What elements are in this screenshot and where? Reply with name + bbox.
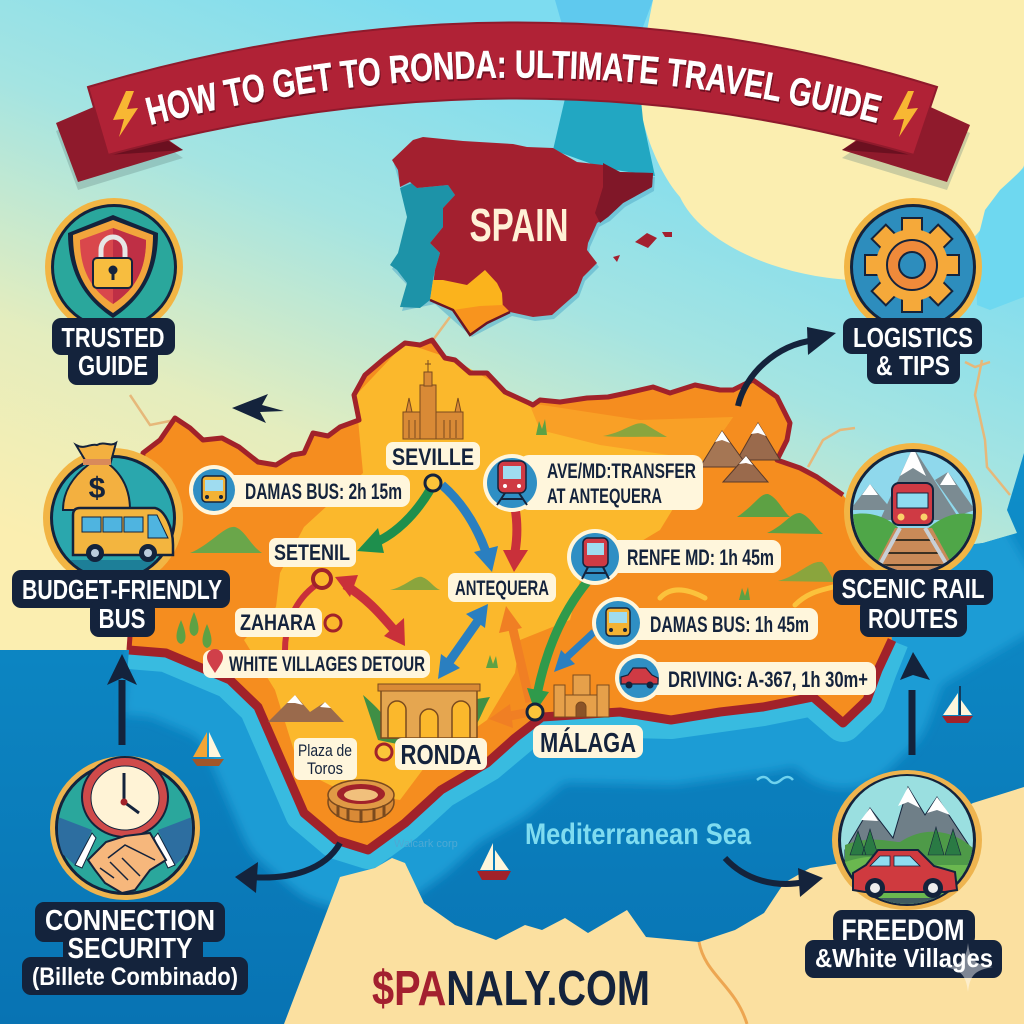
arrow: to Trusted Guide — [232, 394, 284, 423]
label: Mediterranean Sea: Mediterranean Sea — [525, 818, 751, 851]
callout: Damas bus 2h 15m: DAMAS BUS: 2h 15m — [245, 479, 402, 504]
callout: Renfe MD 1h 45m: RENFE MD: 1h 45m — [627, 545, 774, 570]
label: Scenic Rail Routes — [833, 570, 993, 637]
landmark: Ronda bridge — [363, 684, 490, 745]
icon: bus and money bag — [43, 440, 183, 570]
title banner — [56, 22, 970, 190]
icon: sparkle — [945, 943, 993, 992]
callout: Damas bus 1h 45m — [592, 597, 818, 649]
callout: Damas bus 1h 45m: DAMAS BUS: 1h 45m — [650, 612, 809, 637]
map: Andalusia region — [129, 340, 892, 850]
arrow: Seville to Setenil (green) — [357, 490, 430, 553]
map: Spain locator — [390, 137, 672, 337]
panel: Freedom and White Villages — [805, 770, 1002, 978]
arrow: Malaga to Antequera (orange) — [499, 606, 530, 702]
label: Logistics and Tips: & TIPS — [876, 350, 950, 381]
map decorations: mountains and hills — [176, 419, 835, 722]
landmark: Malaga castle — [554, 675, 609, 717]
label: Spain: SPAIN — [470, 199, 568, 251]
panel: Trusted Guide — [45, 198, 183, 385]
label: Connection Security: SECURITY — [68, 933, 192, 965]
icon: red car in mountains — [832, 770, 982, 910]
arrow: bus to Malaga (blue) — [554, 632, 594, 672]
icon: gear — [844, 198, 982, 336]
callout: AVE/MD transfer: AT ANTEQUERA — [547, 485, 662, 508]
label: Trusted Guide — [52, 318, 175, 385]
arrow: Setenil to Ronda (red double) — [335, 575, 405, 646]
location markers — [313, 475, 543, 760]
callout: Driving A-367: DRIVING: A-367, 1h 30m+ — [668, 667, 868, 692]
label: Freedom and White Villages — [805, 910, 1002, 978]
label: Connection Security — [22, 902, 248, 995]
title text: HOW TO GET TO RONDA: ULTIMATE TRAVEL GUIDE — [145, 50, 884, 127]
label: Scenic Rail Routes: SCENIC RAIL — [842, 573, 984, 604]
panel: Connection Security — [22, 756, 248, 995]
brand: Spanaly.com: $PANALY.COM — [372, 962, 650, 1016]
label: Plaza de Toros: Toros — [307, 759, 343, 778]
panel: Scenic Rail Routes — [833, 443, 993, 637]
arrow: Renfe to Malaga (green) — [527, 582, 587, 712]
label: Zahara: ZAHARA — [240, 610, 316, 635]
arrow: Seville to Antequera (blue) — [442, 485, 498, 572]
arrow: to Connection Security — [235, 843, 340, 893]
label: Scenic Rail Routes: ROUTES — [868, 603, 958, 634]
panel: Logistics and Tips — [843, 198, 982, 384]
icon: train in mountains — [844, 443, 982, 581]
label: Ronda: RONDA — [400, 739, 482, 770]
label: White Villages Detour — [203, 649, 430, 678]
icon: sailboats and waves — [192, 686, 973, 880]
arrow: Setenil detour arc (red) — [285, 585, 316, 650]
icon: clock and handshake — [50, 756, 200, 900]
label: Trusted Guide: TRUSTED — [62, 322, 164, 353]
sea — [0, 453, 1024, 1024]
icon: lightning left — [113, 91, 138, 137]
label: Logistics and Tips — [843, 318, 982, 384]
arrow: train to Antequera (red) — [503, 508, 528, 572]
label: Budget-Friendly Bus: BUDGET-FRIENDLY — [22, 574, 222, 605]
bottom land: north Africa — [284, 787, 1024, 1024]
icon: shield with lock — [45, 198, 183, 336]
label: Plaza de Toros: Plaza de — [298, 741, 352, 760]
landmark: Seville cathedral — [403, 360, 463, 439]
label: Budget-Friendly Bus: BUS — [98, 603, 146, 634]
icon: bus and money bag: $ — [89, 472, 106, 505]
icon: lightning right — [893, 91, 918, 137]
watermark: Walcark corp — [394, 838, 458, 850]
label: Setenil: SETENIL — [274, 540, 350, 565]
landmark: Plaza de Toros — [328, 780, 394, 823]
callout: AVE/MD transfer — [483, 454, 703, 512]
label: Trusted Guide: GUIDE — [78, 350, 148, 381]
panel: Budget-Friendly Bus — [12, 443, 230, 637]
callout: Damas bus 2h 15m — [189, 465, 410, 515]
label: Budget-Friendly Bus — [12, 570, 230, 637]
callout: Renfe MD 1h 45m — [567, 529, 781, 585]
label: Freedom and White Villages: FREEDOM — [842, 914, 964, 947]
icon: map pin — [207, 649, 223, 673]
arrow: to Logistics — [738, 327, 836, 406]
label: Seville: SEVILLE — [392, 444, 474, 471]
label: Connection Security: (Billete Combinado) — [32, 963, 238, 991]
label: Malaga: MÁLAGA — [540, 727, 636, 758]
arrow: Antequera to Ronda (blue double) — [438, 604, 488, 679]
label: Freedom and White Villages: &White Villages — [815, 943, 993, 973]
callout: AVE/MD transfer: AVE/MD:TRANSFER — [547, 460, 696, 483]
routes: arrows — [285, 485, 594, 728]
arrow: up to Scenic Rail — [900, 652, 930, 755]
label: Connection Security: CONNECTION — [45, 905, 215, 937]
arrows: navy connectors — [107, 327, 930, 897]
label: Plaza de Toros — [294, 738, 357, 780]
label: White Villages Detour: WHITE VILLAGES DETOUR — [229, 653, 425, 676]
label: Antequera — [448, 573, 556, 602]
callout: Driving A-367 — [615, 654, 876, 702]
label: Antequera: ANTEQUERA — [455, 577, 549, 600]
arrow: Malaga to Ronda (orange) — [489, 704, 530, 728]
label: Logistics and Tips: LOGISTICS — [853, 322, 973, 353]
arrow: to Freedom — [725, 858, 823, 897]
arrow: up to Budget bus — [107, 654, 137, 745]
